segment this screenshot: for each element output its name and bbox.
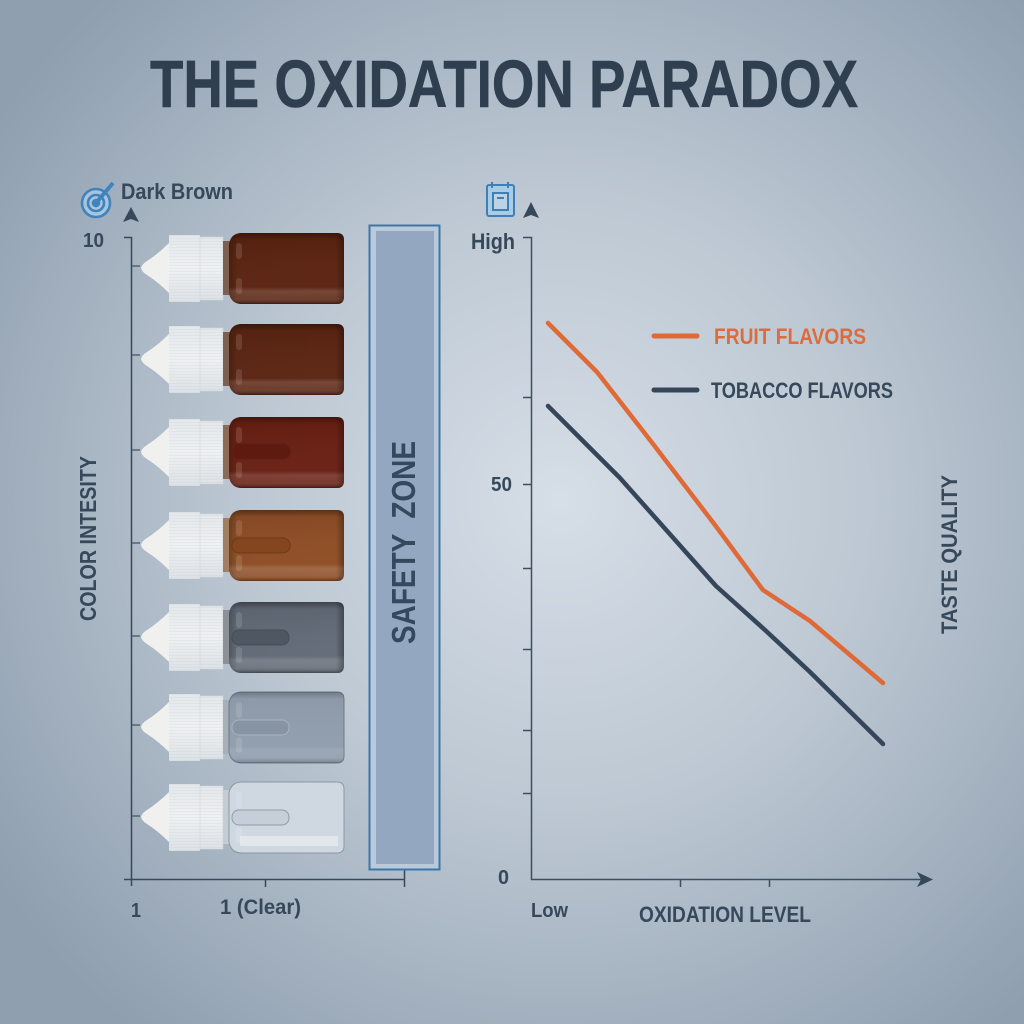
bottle 5 dark grey [141,602,344,673]
line: fruit flavors [548,323,883,683]
y axis and ticks [124,238,404,887]
bottle 1 darkest brown [141,233,344,304]
bottle 2 dark brown [141,324,344,395]
bottle 4 amber [141,510,344,581]
y axis title: TASTE QUALITY [937,475,962,634]
bottle 7 clear [141,782,344,853]
panel: color intensity chart [75,179,440,922]
safety zone: SAFETY ZONE [385,441,422,644]
top label: dark brown: Dark Brown [121,179,233,204]
y axis arrow [123,207,139,222]
axes and ticks [523,238,922,887]
x axis label: 1: 1 [131,900,141,922]
y label: high: High [471,229,515,254]
y label: 50: 50 [491,474,512,496]
y label: 0: 0 [498,867,509,889]
legend: fruit flavors: FRUIT FLAVORS [714,324,866,349]
x axis arrow [917,872,933,887]
y axis label: 10: 10 [83,230,104,252]
safety zone [370,226,440,870]
line: tobacco flavors [548,406,883,744]
bottle 3 red brown [141,417,344,488]
y axis title: COLOR INTESITY [75,456,101,621]
x label: low: Low [531,900,568,922]
panel: taste quality chart [471,182,962,927]
icon: calendar [487,182,514,216]
title: THE OXIDATION PARADOX [150,47,858,122]
bottle 6 mid grey [141,692,344,763]
legend: tobacco flavors: TOBACCO FLAVORS [711,378,893,403]
x axis label: 1 clear: 1 (Clear) [220,896,301,919]
x axis title: OXIDATION LEVEL [639,902,811,927]
icon: gauge target [82,183,113,217]
y axis arrow [523,202,539,218]
